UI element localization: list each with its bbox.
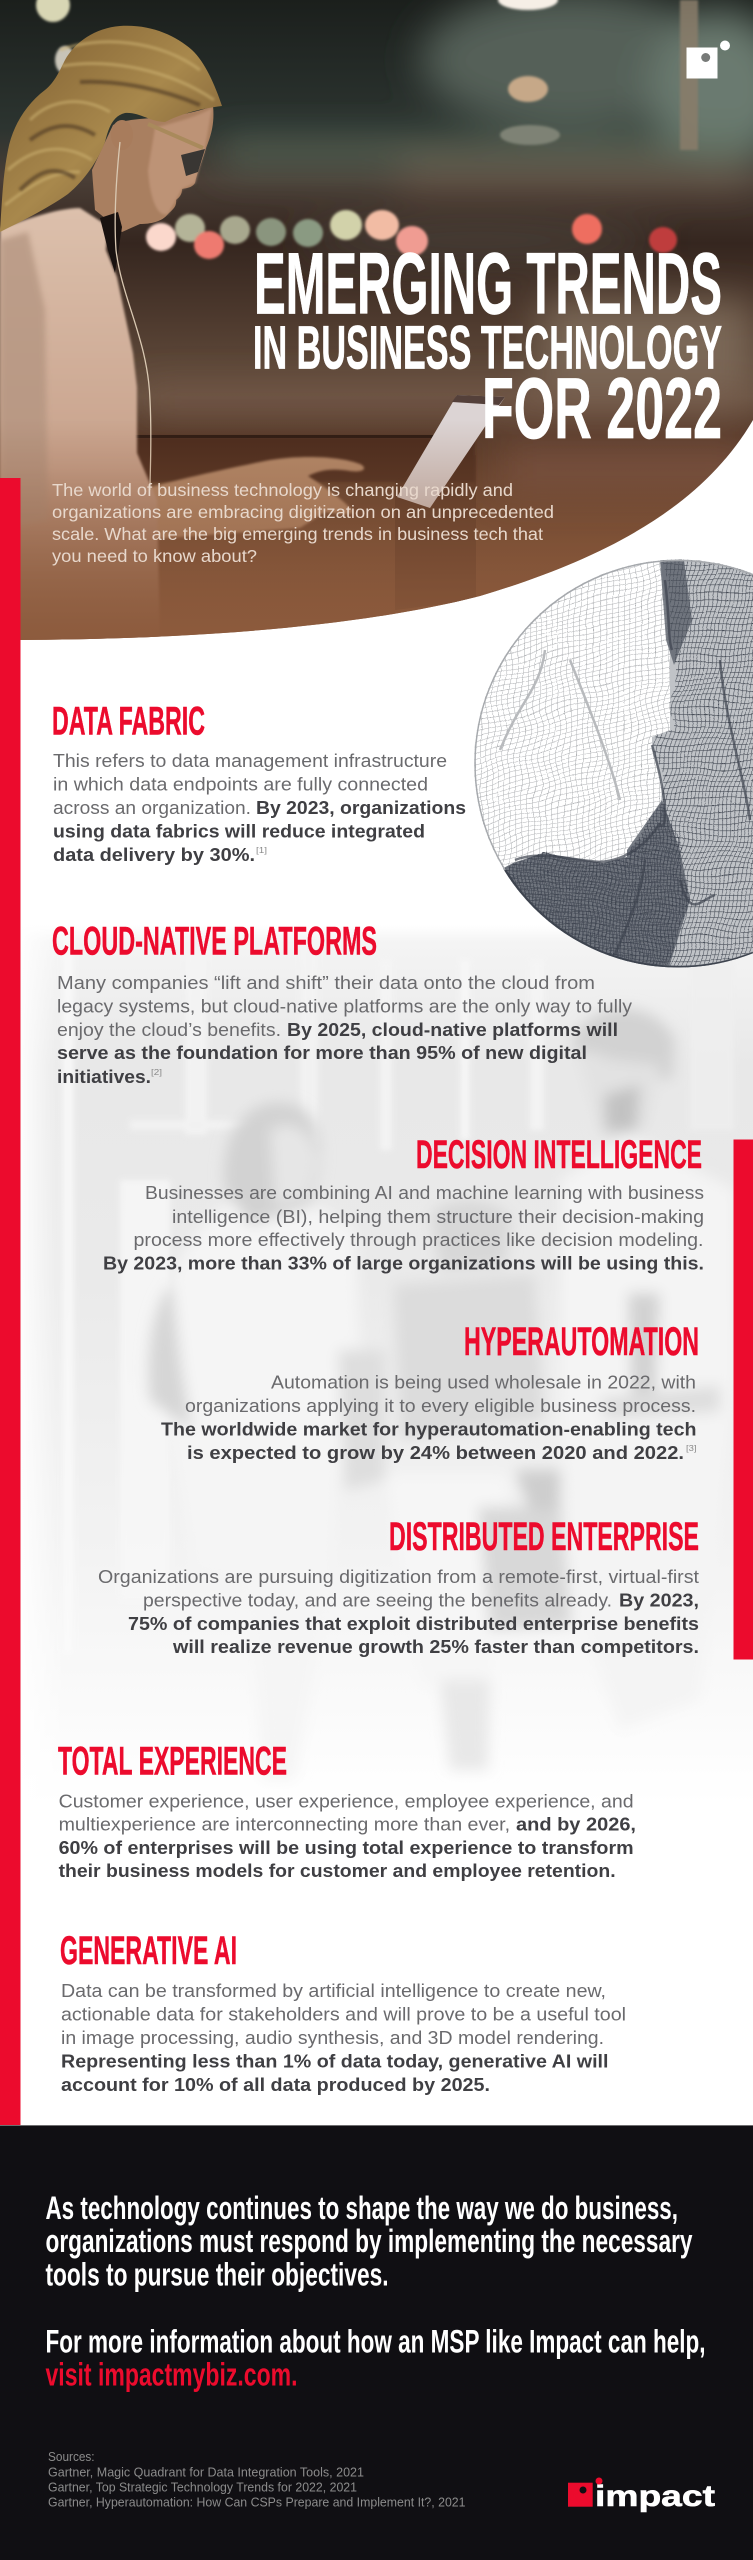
section: total experience: 60% of enterprises will be using total experience to transform xyxy=(59,1838,634,1858)
right red bar xyxy=(734,1140,753,1660)
title xyxy=(253,236,722,457)
footer panel xyxy=(0,2125,753,2560)
section: decision intelligence: Businesses are combining AI and machine learning with business xyxy=(145,1183,704,1203)
dense dark mesh bottom xyxy=(504,802,690,966)
man xyxy=(571,1009,675,1080)
section: data fabric: This refers to data management infrastructure xyxy=(53,751,447,771)
dark mesh xyxy=(504,560,753,968)
section: total experience: TOTAL EXPERIENCE xyxy=(58,1739,287,1783)
section: cloud-native platforms: By 2025, cloud-native platforms will xyxy=(287,1020,618,1040)
section: cloud-native platforms: serve as the foundation for more than 95% of new digital xyxy=(57,1043,587,1063)
section: generative ai: account for 10% of all data produced by 2025. xyxy=(61,2075,490,2095)
section: hyperautomation: Automation is being used wholesale in 2022, with xyxy=(271,1373,696,1393)
section: total experience: Customer experience, user experience, employee experience, and xyxy=(59,1791,634,1811)
section: distributed enterprise: 75% of companies that exploit distributed enterprise benefits xyxy=(128,1614,699,1634)
section: distributed enterprise: will realize revenue growth 25% faster than competitors. xyxy=(172,1637,699,1657)
woman's shirt xyxy=(0,208,160,640)
background photo: faded people xyxy=(20,925,753,1805)
section: distributed enterprise xyxy=(98,1515,699,1657)
sources: Gartner, Magic Quadrant for Data Integration Tools, 2021 xyxy=(48,2464,364,2479)
sources: Gartner, Top Strategic Technology Trends for 2022, 2021 xyxy=(48,2479,357,2494)
section: decision intelligence: process more effectively through practices like decision modeling. xyxy=(134,1230,704,1250)
woman's arm and hands xyxy=(140,457,364,540)
section: hyperautomation: The worldwide market for hyperautomation-enabling tech xyxy=(161,1420,696,1440)
section: decision intelligence: intelligence (BI), helping them structure their decision-making xyxy=(172,1207,704,1227)
mesh sphere graphic xyxy=(474,560,753,968)
section: cloud-native platforms: [2] xyxy=(151,1068,162,1077)
centre person xyxy=(338,1350,385,1490)
section: cloud-native platforms xyxy=(52,920,632,1087)
closing statement xyxy=(46,2190,692,2292)
section: generative ai: GENERATIVE AI xyxy=(60,1929,237,1973)
section: generative ai xyxy=(60,1929,626,2095)
section: total experience: their business models for customer and employee retention. xyxy=(59,1861,616,1881)
intro text: organizations are embracing digitization on an unprecedented xyxy=(52,502,554,522)
closing statement: tools to pursue their objectives. xyxy=(46,2256,388,2292)
woman xyxy=(158,1195,362,1780)
section: hyperautomation xyxy=(161,1320,699,1463)
section: total experience: multiexperience are interconnecting more than ever, xyxy=(59,1815,510,1835)
sources: Gartner, Hyperautomation: How Can CSPs Prepare and Implement It?, 2021 xyxy=(48,2494,466,2510)
section: distributed enterprise: By 2023, xyxy=(619,1590,699,1610)
section: cloud-native platforms: legacy systems, but cloud-native platforms are the only way to fully xyxy=(57,997,632,1017)
left red bar xyxy=(0,478,20,2125)
logo mark: white square with dots xyxy=(686,40,730,78)
section: hyperautomation: is expected to grow by 24% between 2020 and 2022. xyxy=(187,1443,684,1463)
section: data fabric: DATA FABRIC xyxy=(52,700,205,744)
section: cloud-native platforms: CLOUD-NATIVE PLATFORMS xyxy=(52,920,377,964)
street background glow xyxy=(140,0,753,490)
intro text: scale. What are the big emerging trends in business tech that xyxy=(52,524,543,544)
section: data fabric: in which data endpoints are fully connected xyxy=(53,774,428,794)
section: generative ai: Representing less than 1% of data today, generative AI will xyxy=(61,2051,608,2071)
section: generative ai: actionable data for stakeholders and will prove to be a useful tool xyxy=(61,2004,626,2024)
call to action xyxy=(46,2324,706,2393)
earphone cable xyxy=(115,142,151,490)
woman's neck and face xyxy=(92,106,213,232)
call to action: visit impactmybiz.com. xyxy=(46,2357,298,2393)
bottom colour wash xyxy=(0,433,702,640)
section: cloud-native platforms: Many companies “lift and shift” their data onto the cloud from xyxy=(57,973,595,993)
section: distributed enterprise: perspective today, and are seeing the benefits already. xyxy=(143,1590,612,1610)
section: decision intelligence: By 2023, more than 33% of large organizations will be using this. xyxy=(103,1253,704,1273)
impact logo: impact xyxy=(595,2480,715,2513)
section: cloud-native platforms: enjoy the cloud’s benefits. xyxy=(57,1020,281,1040)
section: decision intelligence xyxy=(103,1133,704,1273)
section: distributed enterprise: Organizations are pursuing digitization from a remote-first, virtual-first xyxy=(98,1567,699,1587)
section: total experience: and by 2026, xyxy=(516,1815,636,1835)
section: data fabric: using data fabrics will reduce integrated xyxy=(53,822,425,842)
intro text: you need to know about? xyxy=(52,546,257,566)
neck shadow xyxy=(100,212,122,273)
dark tone underlay xyxy=(500,555,753,1000)
section: data fabric: across an organization. xyxy=(53,798,251,818)
mesh ridge lines xyxy=(515,580,750,955)
light mesh xyxy=(474,560,745,892)
intro text xyxy=(52,480,554,566)
intro text: The world of business technology is changing rapidly and xyxy=(52,480,513,500)
section: data fabric: [1] xyxy=(256,846,267,855)
section: data fabric: By 2023, organizations xyxy=(256,798,466,818)
table and laptop xyxy=(135,437,475,482)
section: data fabric: data delivery by 30%. xyxy=(53,845,255,865)
sources xyxy=(48,2449,466,2510)
section: total experience xyxy=(58,1739,636,1881)
section: hyperautomation: organizations applying it to every eligible business process. xyxy=(185,1396,696,1416)
section: cloud-native platforms: initiatives. xyxy=(57,1067,151,1087)
woman's hair xyxy=(0,26,222,232)
sources: Sources: xyxy=(48,2449,95,2464)
dark mesh right side xyxy=(504,560,753,968)
section: generative ai: Data can be transformed by artificial intelligence to create new, xyxy=(61,1981,606,2001)
section: generative ai: in image processing, audio synthesis, and 3D model rendering. xyxy=(61,2028,604,2048)
hero photo: woman on laptop at night xyxy=(0,0,753,640)
section: data fabric xyxy=(52,700,466,865)
impact logo xyxy=(568,2478,715,2513)
bokeh lights xyxy=(36,0,698,259)
glasses xyxy=(148,124,203,148)
section: hyperautomation: [3] xyxy=(686,1444,696,1453)
